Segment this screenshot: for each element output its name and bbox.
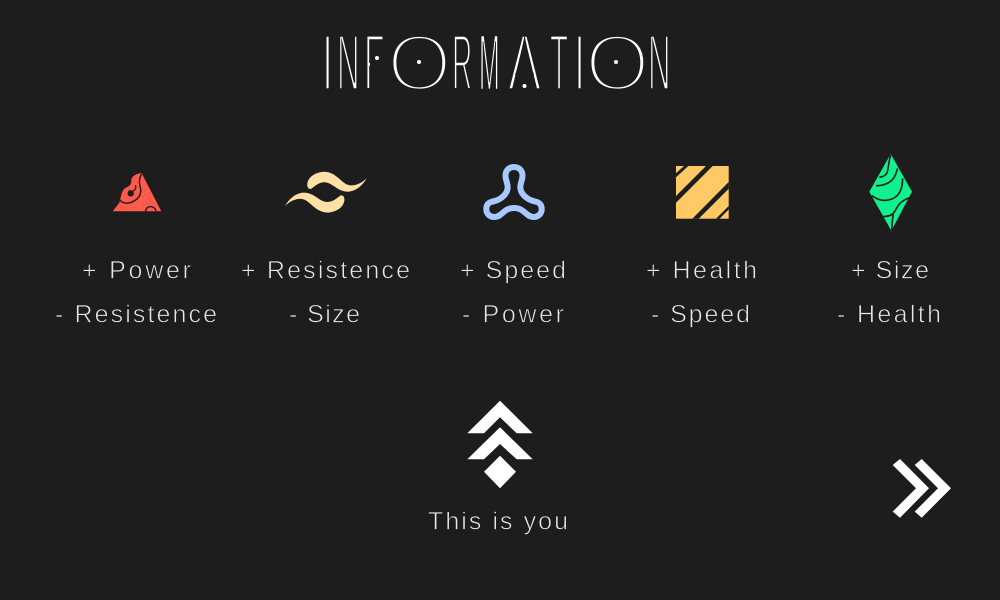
icon: red flame triangle — [113, 173, 161, 211]
label: column 2: + Resistence — [241, 256, 410, 284]
label: column 1 — [55, 256, 217, 328]
label: column 1: - Resistence — [55, 300, 217, 328]
title: A — [508, 18, 541, 107]
label: column 1: + Power — [82, 256, 191, 284]
icon: green diamond — [869, 154, 912, 231]
label: column 3: - Power — [462, 300, 564, 328]
title: M — [479, 18, 499, 107]
icon: striped yellow square — [676, 166, 729, 219]
icon: blue trefoil — [486, 167, 542, 217]
label: column 3 — [460, 256, 566, 328]
label: column 5 — [837, 256, 941, 328]
label: column 3: + Speed — [460, 256, 566, 284]
title: T — [550, 18, 568, 107]
title — [322, 18, 671, 107]
title: N — [648, 18, 671, 107]
title: R — [452, 18, 472, 107]
label: column 5: + Size — [851, 256, 929, 284]
label: column 5: - Health — [837, 300, 941, 328]
label: column 4 — [646, 256, 757, 328]
title: I — [574, 18, 585, 107]
label: column 4: + Health — [646, 256, 757, 284]
label: column 4: - Speed — [651, 300, 750, 328]
title: N — [337, 18, 360, 107]
label: column 2: - Size — [289, 300, 360, 328]
title: I — [322, 18, 333, 107]
label: column 2 — [241, 256, 410, 328]
icon: player marker — [467, 401, 533, 488]
title: O — [585, 18, 650, 107]
title: F — [364, 18, 385, 107]
icon: cream waves — [285, 172, 367, 213]
label: this is you: This is you — [428, 508, 568, 536]
arrow: next — [893, 459, 951, 518]
title: O — [387, 18, 452, 107]
